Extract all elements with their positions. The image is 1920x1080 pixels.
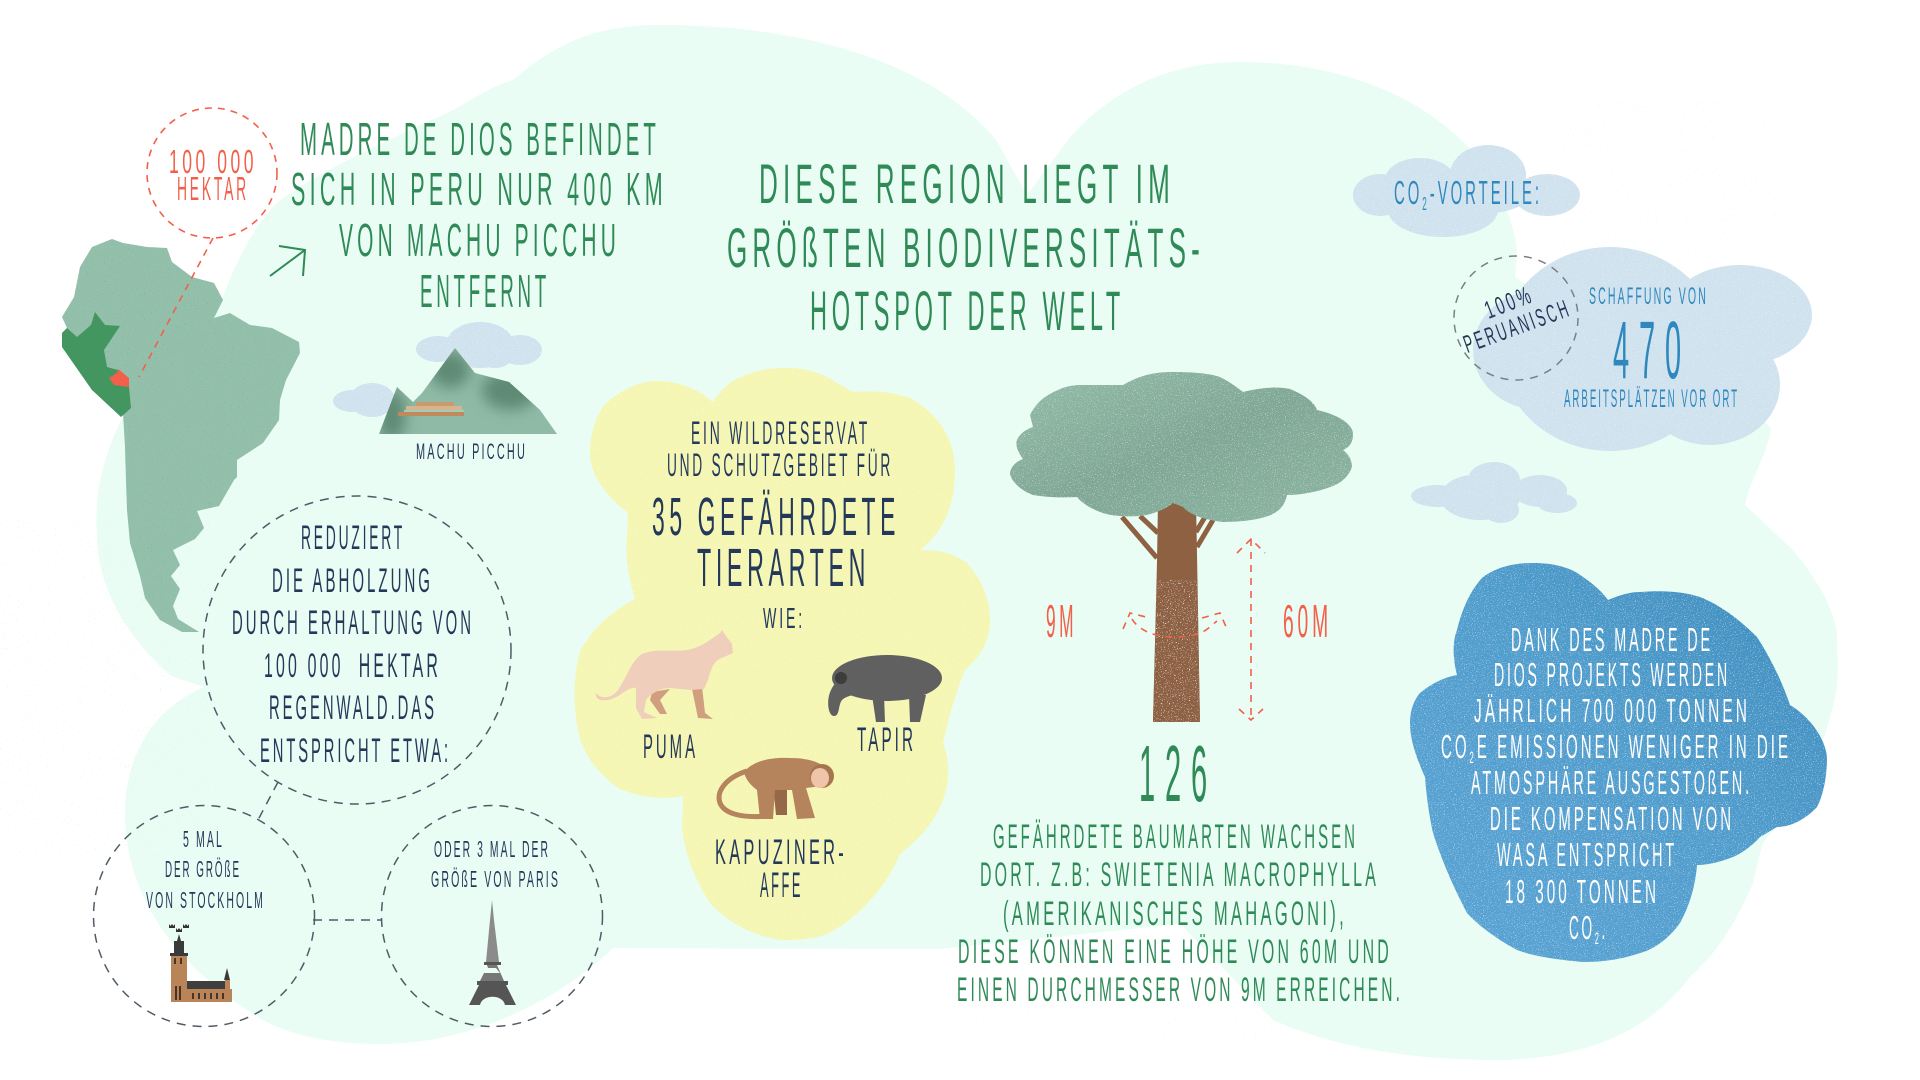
cloud: CO2 heading: 2	[1422, 194, 1430, 214]
text: GEFÄHRDETE BAUMARTEN WACHSEN	[993, 818, 1358, 856]
cloud: CO2 heading: CO	[1394, 174, 1457, 211]
icon: Eiffel tower	[469, 900, 516, 1005]
callout: 100 000 hektar	[147, 108, 277, 238]
text: 126	[1139, 729, 1217, 818]
callout circle: deforestation: REGENWALD.DAS	[269, 689, 437, 727]
branches	[1122, 516, 1213, 558]
crown	[1010, 372, 1353, 522]
panel: emissions: 2	[1595, 929, 1601, 948]
Madre de Dios region	[109, 369, 129, 387]
icon: tapir	[828, 655, 942, 722]
panel: emissions: 18 300 TONNEN	[1505, 873, 1659, 910]
panel: endangered animals: WIE:	[763, 603, 805, 635]
connector lines	[258, 782, 382, 920]
heading: Madre de Dios: ENTFERNT	[420, 265, 550, 317]
cloud: jobs: 470	[1613, 305, 1691, 396]
text: DIESE REGION LIEGT IM	[759, 152, 1175, 215]
heading: biodiversity hotspot	[727, 152, 1205, 342]
icon: tree	[1010, 372, 1353, 722]
trunk grain	[1153, 580, 1200, 722]
badge: 100% peruanisch	[1454, 256, 1578, 380]
label: AFFE	[760, 866, 803, 905]
panel: emissions: WASA ENTSPRICHT	[1497, 836, 1677, 873]
yellow blob	[574, 368, 990, 940]
cloud: CO2 heading: -VORTEILE:	[1430, 174, 1542, 211]
callout circle: deforestation: DIE ABHOLZUNG	[272, 562, 433, 600]
cloud: jobs	[1473, 247, 1812, 451]
circle: Paris: ODER 3 MAL DER	[434, 836, 550, 862]
text: SICH IN PERU NUR 400 KM	[291, 163, 667, 215]
circle: Stockholm: 5 MAL	[183, 826, 224, 852]
cloud: jobs: SCHAFFUNG VON	[1589, 283, 1708, 310]
mountain	[379, 348, 557, 434]
measurement: 9M: 9M	[1046, 595, 1077, 647]
trunk	[1153, 490, 1200, 722]
text block: tree species: (AMERIKANISCHES MAHAGONI),	[1003, 895, 1347, 933]
panel: endangered animals: EIN WILDRESERVAT	[691, 415, 870, 451]
clouds	[333, 322, 542, 417]
panel: endangered animals: TIERARTEN	[697, 538, 870, 598]
panel: emissions: CO	[1441, 728, 1504, 765]
badge: 100% peruanisch: PERUANISCH	[1460, 294, 1575, 359]
text: GRÖßTEN BIODIVERSITÄTS-	[727, 216, 1205, 279]
measurement: 9M	[1046, 595, 1227, 647]
text: DIESE KÖNNEN EINE HÖHE VON 60M UND	[958, 933, 1392, 971]
heading: biodiversity hotspot: HOTSPOT DER WELT	[810, 279, 1125, 342]
panel: emissions	[1410, 563, 1827, 962]
Peru	[62, 312, 131, 417]
cloud: CO2 heading	[1353, 145, 1580, 237]
circle: Stockholm: VON STOCKHOLM	[146, 887, 265, 913]
icon: arrow	[270, 246, 305, 276]
heading: Madre de Dios	[291, 113, 667, 317]
panel: endangered animals	[574, 368, 990, 940]
pointer line	[139, 238, 213, 377]
circle: Paris	[382, 806, 602, 1026]
callout circle: deforestation: DURCH ERHALTUNG VON	[232, 604, 474, 642]
icon: capuchin monkey	[719, 758, 834, 819]
text: MADRE DE DIOS BEFINDET	[300, 113, 660, 165]
panel: emissions: .	[1601, 909, 1608, 946]
panel: endangered animals: UND SCHUTZGEBIET FÜR	[667, 447, 893, 483]
icon: Machu Picchu	[333, 322, 557, 464]
panel: endangered animals: PUMA	[643, 728, 698, 766]
icon: Machu Picchu: MACHU PICCHU	[416, 439, 527, 464]
circle: Stockholm: DER GRÖßE	[165, 856, 241, 882]
callout circle: deforestation: ENTSPRICHT ETWA:	[260, 732, 451, 770]
callout: 100 000 hektar: HEKTAR	[177, 170, 249, 207]
map: South America	[62, 238, 300, 632]
mountain shading	[378, 352, 538, 441]
panel: endangered animals: 35 GEFÄHRDETE	[652, 487, 900, 547]
circle: Stockholm	[94, 806, 314, 1026]
circle: Paris: GRÖßE VON PARIS	[431, 866, 560, 892]
panel: emissions: CO	[1569, 909, 1632, 946]
callout circle: deforestation: 100 000 HEKTAR	[264, 647, 441, 685]
label	[715, 833, 847, 905]
callout circle: deforestation: REDUZIERT	[301, 519, 405, 557]
small cloud	[1411, 462, 1577, 523]
text block: tree species	[957, 818, 1403, 1009]
text: EINEN DURCHMESSER VON 9M ERREICHEN.	[957, 971, 1403, 1009]
heading: Madre de Dios: VON MACHU PICCHU	[339, 214, 620, 266]
panel: endangered animals: TAPIR	[857, 721, 916, 759]
callout: 100 000 hektar: 100 000	[169, 143, 257, 180]
callout circle: deforestation	[203, 496, 511, 804]
text: DORT. Z.B: SWIETENIA MACROPHYLLA	[980, 856, 1379, 894]
text: 60M	[1283, 595, 1332, 647]
panel: emissions: 2	[1470, 748, 1477, 767]
icon: puma	[596, 630, 733, 719]
continent	[62, 239, 300, 632]
badge: 100% peruanisch: 100%	[1481, 281, 1537, 325]
panel: endangered animals: KAPUZINER-	[715, 833, 847, 872]
measurement: 60M	[1237, 539, 1332, 720]
terraces	[398, 402, 464, 416]
icon: Stockholm city hall	[169, 924, 232, 1002]
